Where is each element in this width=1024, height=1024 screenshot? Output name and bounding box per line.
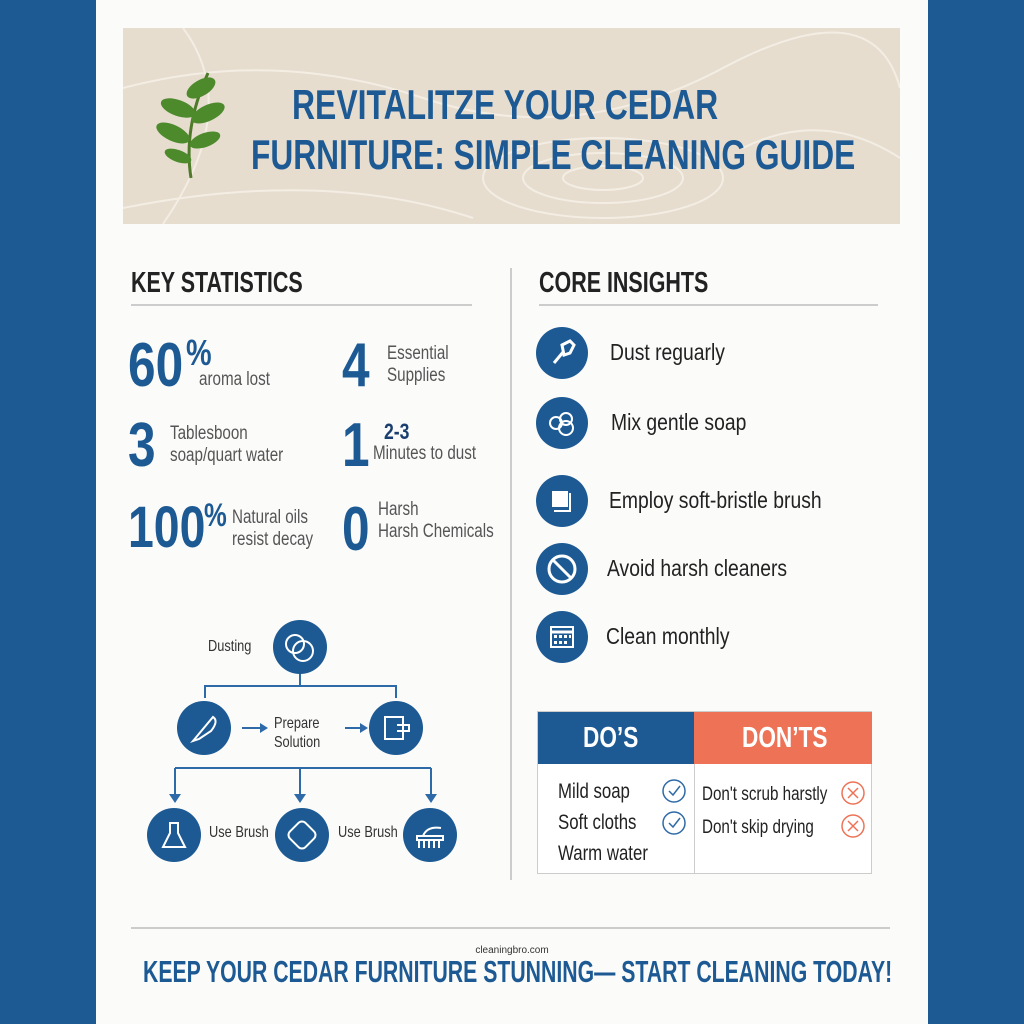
icon: box — [369, 701, 423, 755]
stat 60%: aroma lost — [199, 369, 270, 390]
panel: core insights — [536, 267, 878, 663]
stat 3: 3 — [128, 411, 156, 480]
stat 4: 4 — [342, 331, 370, 400]
header: do's: DO’S — [583, 722, 638, 754]
stat 1: Minutes to dust — [373, 443, 476, 464]
stat 4: Essential — [387, 343, 449, 364]
icon: feather — [177, 701, 231, 755]
flowchart — [147, 620, 457, 862]
insight: mix gentle soap: Mix gentle soap — [611, 409, 746, 435]
stat 100% — [128, 495, 313, 560]
stat 60%: % — [186, 332, 212, 373]
stat 3 — [128, 411, 283, 480]
divider — [510, 268, 512, 880]
don'ts list: Don't skip drying — [702, 817, 814, 838]
text: use brush 2: Use Brush — [338, 824, 398, 841]
header: don'ts — [694, 712, 872, 764]
header: don'ts: DON’TS — [742, 722, 827, 754]
do's list — [558, 779, 686, 865]
text: prepare solution: Prepare — [274, 715, 320, 732]
stat 0: Harsh — [378, 499, 419, 520]
stat 60% — [128, 331, 270, 400]
stat 60%: 60 — [128, 331, 183, 400]
stat 0: Harsh Chemicals — [378, 521, 494, 542]
do's list: Mild soap — [558, 780, 630, 803]
don'ts list — [702, 781, 865, 838]
do's list: Warm water — [558, 842, 648, 865]
insight: clean monthly — [536, 611, 730, 663]
stat 100%: resist decay — [232, 529, 313, 550]
stat 100%: % — [204, 497, 227, 533]
stat 1: 1 — [342, 411, 370, 480]
icon: scrub brush — [403, 808, 457, 862]
insight: mix gentle soap — [536, 397, 746, 449]
insight: avoid harsh cleaners: Avoid harsh cleaners — [607, 555, 787, 581]
panel: key statistics — [128, 267, 494, 564]
icon: flask — [147, 808, 201, 862]
heading: core insights: CORE INSIGHTS — [539, 267, 708, 299]
stat 1: 2-3 — [384, 419, 409, 444]
insight: dust regularly — [536, 327, 725, 379]
stat 3: Tablesboon — [170, 423, 248, 444]
insight: soft-bristle brush: Employ soft-bristle brush — [609, 487, 822, 513]
footer call to action: KEEP YOUR CEDAR FURNITURE STUNNING— START CLEANING TODAY! — [143, 954, 892, 989]
don'ts list: Don't scrub harstly — [702, 784, 827, 805]
icon: sponge — [275, 808, 329, 862]
text: prepare solution — [274, 715, 320, 751]
do's list: Soft cloths — [558, 811, 636, 834]
icon: bubbles — [273, 620, 327, 674]
insight: dust regularly: Dust reguarly — [610, 339, 725, 365]
text: use brush 1: Use Brush — [209, 824, 269, 841]
header banner — [123, 28, 900, 224]
header: do's — [538, 712, 694, 764]
title: FURNITURE: SIMPLE CLEANING GUIDE — [251, 131, 855, 178]
stat 3: soap/quart water — [170, 445, 283, 466]
title: REVITALITZE YOUR CEDAR — [292, 81, 718, 128]
icon: cedar branch — [156, 72, 225, 178]
text: dusting: Dusting — [208, 638, 251, 655]
insight: soft-bristle brush — [536, 475, 822, 527]
stat 0: 0 — [342, 495, 370, 564]
stat 0 — [342, 495, 494, 564]
stat 4 — [342, 331, 449, 400]
stat 4: Supplies — [387, 365, 445, 386]
stat 100%: 100 — [128, 495, 205, 560]
stat 100%: Natural oils — [232, 507, 308, 528]
title — [251, 81, 855, 178]
source text: cleaningbro.com — [475, 945, 549, 956]
text: prepare solution: Solution — [274, 734, 320, 751]
do's and don'ts table — [537, 711, 872, 874]
insight: avoid harsh cleaners — [536, 543, 787, 595]
heading: key statistics: KEY STATISTICS — [131, 267, 303, 299]
stat 1 — [342, 411, 476, 480]
insight: clean monthly: Clean monthly — [606, 623, 730, 649]
